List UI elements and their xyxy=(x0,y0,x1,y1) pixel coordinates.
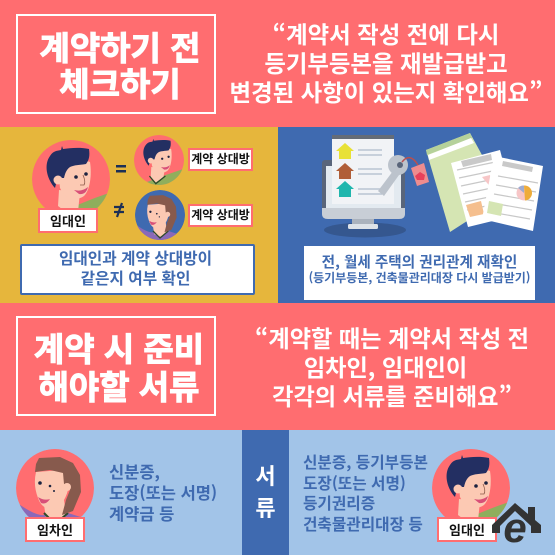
panel: yellow identity check xyxy=(0,127,278,303)
panel: light blue documents xyxy=(0,430,555,555)
quote: prepare each document xyxy=(255,320,529,412)
quote: reissue register: 변경된 사항이 있는지 확인해요” xyxy=(230,74,542,108)
callout: recheck rights: (등기부등본, 건축물관리대장 다시 발급받기) xyxy=(309,269,530,286)
text: landlord documents: 도장(또는 서명) xyxy=(303,471,406,494)
text: landlord documents xyxy=(303,450,428,535)
icon: landlord avatar xyxy=(432,449,510,517)
label: landlord xyxy=(38,208,98,233)
label: counterpart 1: 계약 상대방 xyxy=(191,150,250,167)
panel: documents center bar: 서 xyxy=(255,459,276,491)
logo: house e: e xyxy=(503,504,527,551)
quote: prepare each document: 각각의 서류를 준비해요” xyxy=(272,378,512,412)
panel: documents center bar xyxy=(242,430,289,555)
panel: blue rights check xyxy=(278,127,555,303)
text: tenant documents: 계약금 등 xyxy=(109,501,174,525)
heading: check before contract: 체크하기 xyxy=(59,58,181,106)
icon: counterpart same person xyxy=(134,135,184,185)
icon: tenant avatar xyxy=(16,449,94,517)
label: counterpart 1 xyxy=(188,148,253,171)
heading box: documents to prepare xyxy=(16,316,216,416)
illustrations xyxy=(16,133,543,517)
callout: confirm identity: 같은지 여부 확인 xyxy=(81,266,190,289)
quote: prepare each document: 임차인, 임대인이 xyxy=(304,349,467,383)
quote: reissue register xyxy=(230,16,542,108)
label: counterpart 2: 계약 상대방 xyxy=(191,206,250,223)
heading box: check before contract xyxy=(16,14,216,114)
panel: documents center bar: 류 xyxy=(255,491,276,523)
icon: envelope and documents xyxy=(426,133,543,232)
label: tenant: 임차인 xyxy=(37,520,73,539)
quote: reissue register: 등기부등본을 재발급받고 xyxy=(264,45,508,79)
label: landlord bottom xyxy=(437,517,497,542)
callout: confirm identity: 임대인과 계약 상대방이 xyxy=(59,246,212,269)
callout: recheck rights xyxy=(304,246,535,300)
text: tenant documents xyxy=(109,459,217,525)
heading: documents to prepare xyxy=(34,323,204,409)
label: landlord: 임대인 xyxy=(50,211,86,230)
callout: recheck rights: 전, 월세 주택의 권리관계 재확인 xyxy=(322,251,517,272)
label: counterpart 2 xyxy=(188,204,253,227)
icon: equal sign xyxy=(116,165,126,172)
text: landlord documents: 신분증, 등기부등본 xyxy=(303,450,428,473)
text: tenant documents: 신분증, xyxy=(109,459,160,483)
text: tenant documents: 도장(또는 서명) xyxy=(109,480,217,504)
icon: landlord avatar large xyxy=(32,140,110,208)
heading: documents to prepare: 해야할 서류 xyxy=(38,361,200,409)
text: landlord documents: 건축물관리대장 등 xyxy=(303,512,423,535)
label: tenant xyxy=(25,517,85,542)
callout: confirm identity xyxy=(20,244,255,295)
heading: check before contract: 계약하기 전 xyxy=(39,22,201,70)
icon: counterpart different person xyxy=(135,190,185,245)
icon: not equal sign xyxy=(114,203,124,217)
quote: prepare each document: “계약할 때는 계약서 작성 전 xyxy=(255,320,529,354)
quote: reissue register: “계약서 작성 전에 다시 xyxy=(273,16,499,50)
heading: documents to prepare: 계약 시 준비 xyxy=(34,323,204,371)
text: landlord documents: 등기권리증 xyxy=(303,491,375,514)
label: landlord bottom: 임대인 xyxy=(449,520,485,539)
icon: computer monitor with house list xyxy=(322,135,429,238)
heading: check before contract xyxy=(39,22,201,106)
